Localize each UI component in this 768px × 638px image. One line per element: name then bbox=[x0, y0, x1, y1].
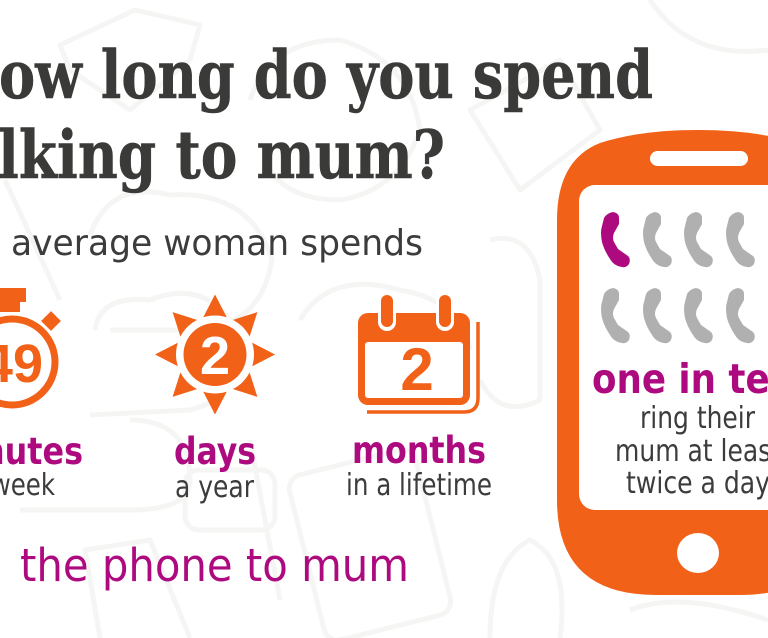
icon: sun 2: 2 bbox=[200, 326, 230, 386]
callout: one in ten: ring their bbox=[640, 401, 756, 436]
stat: days a year: a year bbox=[175, 470, 255, 505]
phone screen bbox=[579, 185, 768, 510]
handset icons bbox=[601, 212, 755, 343]
icon: calendar 2 bbox=[358, 291, 478, 412]
title: lking to mum? bbox=[0, 116, 445, 194]
stat: days a year: days bbox=[174, 430, 256, 473]
title bbox=[0, 36, 653, 194]
phone bbox=[557, 130, 768, 595]
closing line: the phone to mum bbox=[20, 539, 409, 592]
phone button bbox=[677, 533, 719, 573]
icon: sun 2 bbox=[155, 294, 275, 414]
stat: minutes a week bbox=[0, 430, 83, 503]
stat: months in a lifetime: months bbox=[352, 429, 486, 472]
subheading: average woman spends bbox=[11, 223, 423, 264]
icon: calendar 2: 2 bbox=[400, 336, 434, 403]
icon: stopwatch 49 bbox=[0, 288, 61, 405]
stat: months in a lifetime bbox=[346, 429, 492, 503]
phone speaker bbox=[650, 151, 748, 166]
stat: months in a lifetime: in a lifetime bbox=[346, 468, 492, 503]
stat: days a year bbox=[174, 430, 256, 505]
callout: one in ten bbox=[592, 355, 768, 501]
